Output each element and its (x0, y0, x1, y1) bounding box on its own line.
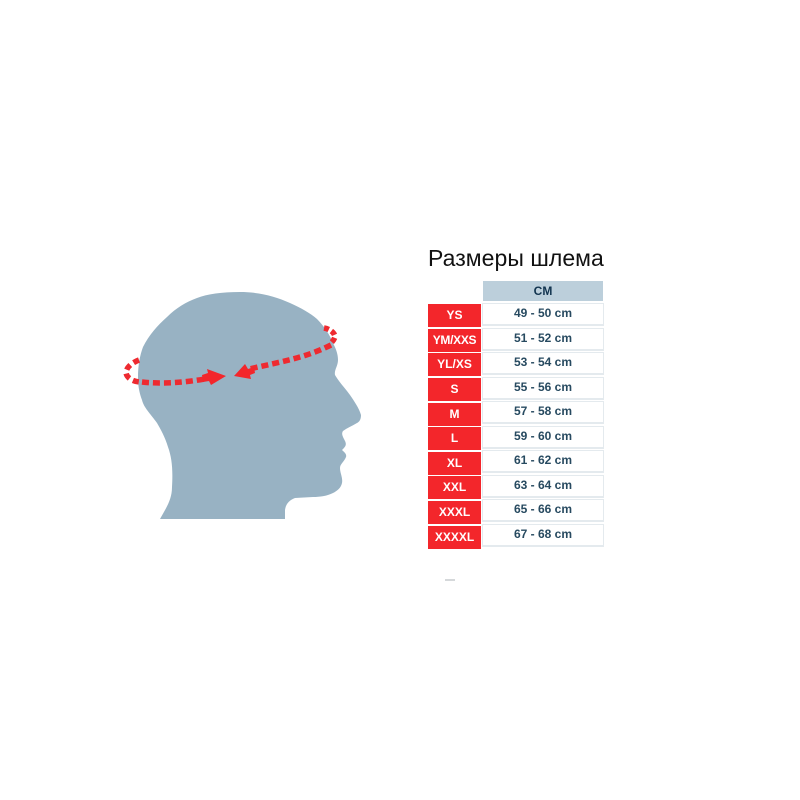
measuring line left to centre with arrow (142, 369, 226, 385)
size label XXXL (428, 501, 481, 524)
size label S (428, 378, 481, 401)
size label YS (428, 304, 481, 327)
size label YL/XS (428, 353, 481, 376)
size label XXXXL: XXXXL (435, 530, 474, 544)
measurement M (482, 401, 604, 424)
size label L (428, 427, 481, 450)
size label XXL: XXL (443, 480, 466, 494)
measurement XL: 61 - 62 cm (514, 453, 572, 467)
back dashes loop (126, 360, 139, 382)
measurement YM/XXS: 51 - 52 cm (514, 331, 572, 345)
measurement YL/XS: 53 - 54 cm (514, 355, 572, 369)
size label YM/XXS (428, 329, 481, 352)
size label YM/XXS: YM/XXS (433, 333, 476, 347)
measurement YS: 49 - 50 cm (514, 306, 572, 320)
size label M: M (450, 407, 460, 421)
title: Размеры шлема (428, 245, 604, 271)
front dashes loop (324, 328, 335, 343)
size table (428, 281, 604, 549)
head illustration with measuring line (124, 292, 361, 519)
size label YL/XS: YL/XS (437, 357, 472, 371)
size label XXXL: XXXL (439, 505, 470, 519)
measurement L: 59 - 60 cm (514, 429, 572, 443)
table column header (483, 281, 603, 301)
size label XXXXL (428, 526, 481, 549)
measurement YM/XXS (482, 328, 604, 351)
measurement S (482, 377, 604, 400)
measurement XXXL: 65 - 66 cm (514, 502, 572, 516)
head silhouette (138, 292, 361, 519)
measurement M: 57 - 58 cm (514, 404, 572, 418)
size label M (428, 403, 481, 426)
small grey mark (445, 579, 455, 581)
size label XL (428, 452, 481, 475)
measurement XXL: 63 - 64 cm (514, 478, 572, 492)
measurement S: 55 - 56 cm (514, 380, 572, 394)
size label YS: YS (446, 308, 462, 322)
size label XL: XL (447, 456, 462, 470)
measurement XL (482, 450, 604, 473)
measurement XXXL (482, 499, 604, 522)
size label XXL (428, 476, 481, 499)
table column header: CM (534, 284, 552, 298)
measurement L (482, 426, 604, 449)
size label L: L (451, 431, 458, 445)
measurement YS (482, 303, 604, 326)
measuring line right to centre with arrow (234, 345, 331, 379)
measurement XXXXL: 67 - 68 cm (514, 527, 572, 541)
measurement YL/XS (482, 352, 604, 375)
size label S: S (450, 382, 458, 396)
measurement XXXXL (482, 524, 604, 547)
measurement XXL (482, 475, 604, 498)
